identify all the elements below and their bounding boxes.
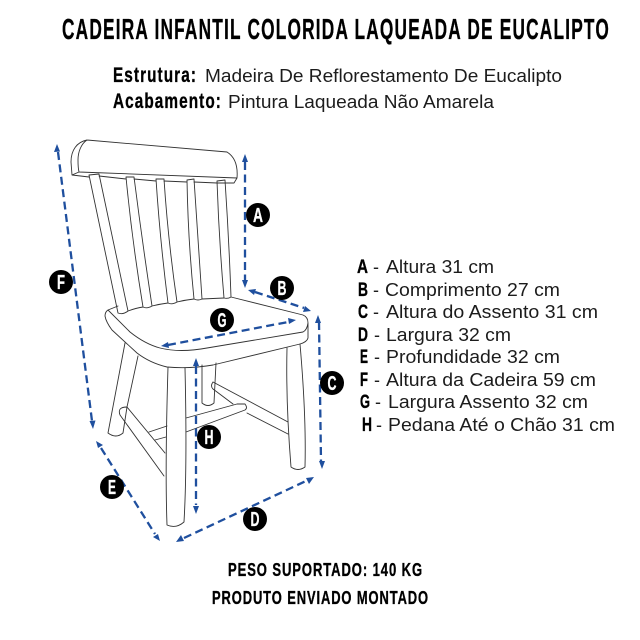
badge E [100, 475, 124, 499]
specs: structure and finish: Madeira De Reflorestamento De Eucalipto [205, 66, 562, 86]
specs: structure and finish: Estrutura: [113, 64, 197, 87]
badge F: F [57, 272, 65, 294]
dimension legend: - [373, 257, 379, 277]
dimension legend: - [374, 370, 380, 390]
dimension legend: H [362, 415, 372, 436]
chair seat [105, 297, 308, 368]
dimension legend: Comprimento 27 cm [385, 280, 560, 300]
note: shipped assembled: PRODUTO ENVIADO MONTADO [212, 588, 429, 608]
badge C [320, 371, 344, 395]
dimension H arrow [193, 358, 199, 514]
dimension legend: - [373, 280, 379, 300]
chair legs [108, 343, 305, 526]
badge D [243, 507, 267, 531]
dimension legend: B [358, 280, 368, 301]
chair stretchers [119, 382, 288, 476]
badge H: H [204, 427, 214, 449]
badge B: B [278, 278, 286, 300]
dimension legend: - [374, 325, 380, 345]
dimension legend: F [360, 370, 368, 391]
dimension legend: - [373, 302, 379, 322]
dimension legend: Altura do Assento 31 cm [386, 302, 598, 322]
dimension legend [357, 257, 615, 436]
dimension C arrow [315, 315, 325, 469]
badge D: D [250, 509, 260, 531]
dimension legend: Largura 32 cm [386, 325, 511, 345]
dimension legend: Altura da Cadeira 59 cm [386, 370, 596, 390]
dimension E arrow [96, 441, 160, 541]
chair line drawing [71, 140, 308, 526]
dimension legend: - [375, 392, 381, 412]
dimension legend: - [374, 347, 380, 367]
badge A [246, 203, 270, 227]
dimension legend: Profundidade 32 cm [386, 347, 560, 367]
dimension legend: Pedana Até o Chão 31 cm [388, 415, 615, 435]
badge E: E [108, 477, 116, 499]
dimension D arrow [176, 477, 314, 542]
dimension legend: - [376, 415, 382, 435]
dimension legend: D [358, 325, 368, 346]
chair spindles [89, 174, 231, 314]
badge G [210, 308, 234, 332]
dimension legend: Largura Assento 32 cm [388, 392, 588, 412]
dimension legend: Altura 31 cm [386, 257, 494, 277]
dimension F arrow [54, 144, 96, 429]
dimension legend: C [358, 302, 368, 323]
dimension legend: E [360, 347, 368, 368]
badge B [270, 276, 294, 300]
dimension B arrow [248, 289, 311, 312]
note: supported weight: PESO SUPORTADO: 140 KG [228, 560, 423, 580]
dimension G arrow [161, 318, 296, 348]
badge F [49, 270, 73, 294]
dimension legend: G [360, 392, 370, 413]
dimension legend: A [357, 257, 368, 278]
badge G: G [218, 310, 226, 332]
badge H [197, 425, 221, 449]
dimension A arrow [242, 154, 248, 288]
specs: structure and finish [113, 64, 562, 113]
chair backrest [71, 140, 237, 183]
badge C: C [328, 373, 336, 395]
specs: structure and finish: Pintura Laqueada Não Amarela [228, 92, 495, 112]
badge A: A [253, 205, 263, 227]
specs: structure and finish: Acabamento: [113, 90, 222, 113]
